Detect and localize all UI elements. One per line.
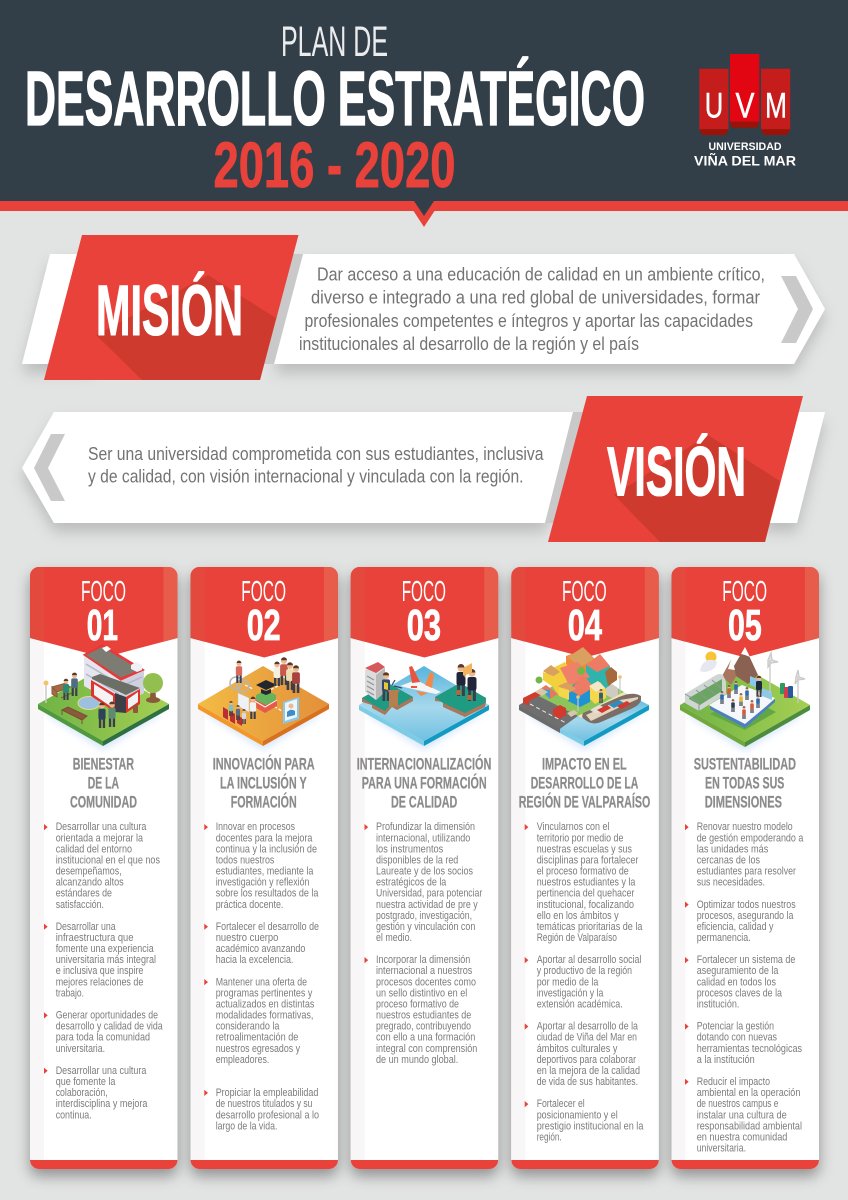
foco 05 heading: 05 — [728, 601, 762, 650]
foco 03 title: PARA UNA FORMACIÓN — [362, 773, 487, 792]
foco 05 list: responsabilidad ambiental — [697, 1120, 802, 1132]
foco 05 list: Optimizar todos nuestros — [697, 899, 796, 911]
foco 01 list: trabajo. — [56, 987, 84, 999]
foco 04 list: nuestras escuelas y sus — [537, 843, 632, 855]
foco 05 heading: FOCO — [722, 576, 767, 608]
panel: misión — [22, 235, 825, 380]
foco 03 list: nuestra actividad de pre y — [376, 899, 478, 911]
foco 01 list: Desarrollar una cultura — [56, 821, 147, 833]
foco 02 heading: FOCO — [241, 576, 286, 608]
foco 03 title: INTERNACIONALIZACIÓN — [357, 754, 491, 773]
foco 05 list: cercanas de los — [697, 854, 760, 866]
foco 03 heading — [402, 576, 446, 650]
foco 05 list: dotando con nuevas — [697, 1032, 777, 1044]
logo: UVM: UNIVERSIDAD — [708, 141, 782, 153]
visión white ribbon — [22, 412, 825, 523]
visión text: Ser una universidad comprometida con sus estudiantes, inclusiva — [88, 443, 544, 464]
visión chevron — [34, 434, 65, 501]
foco 04 list: ello en los ámbitos y — [537, 910, 619, 922]
misión text — [299, 264, 765, 354]
foco 02 list: investigación y reflexión — [216, 877, 309, 889]
foco 01 list: estándares de — [56, 888, 112, 900]
foco 04 heading — [562, 576, 607, 650]
foco 01 list: calidad del entorno — [56, 843, 132, 855]
foco 04 list: territorio por medio de — [537, 832, 623, 844]
foco 03 list: disponibles de la red — [376, 854, 458, 866]
foco 02 title: LA INCLUSIÓN Y — [220, 773, 307, 792]
foco 03 list: nuestros estudiantes de — [376, 1010, 471, 1022]
foco 02 list: considerando la — [216, 1021, 280, 1033]
misión red label: MISIÓN — [96, 272, 243, 351]
title: years: 2016 - 2020 — [214, 129, 456, 201]
foco 04 list: el proceso formativo de — [537, 866, 629, 878]
foco 02 list: práctica docente. — [216, 899, 283, 911]
foco 03 title — [357, 754, 491, 812]
foco 03 list: el medio. — [376, 932, 412, 944]
foco 03 list: de un mundo global. — [376, 1054, 458, 1066]
visión red label: VISIÓN — [607, 433, 746, 511]
visión text — [88, 443, 544, 487]
foco 05 list — [685, 821, 804, 1154]
foco 05 list: de gestión empoderando a — [697, 832, 804, 844]
foco 03 list: procesos docentes como — [376, 976, 476, 988]
foco 02 list: académico avanzando — [216, 943, 305, 955]
foco 02 list: empleadores. — [216, 1054, 269, 1066]
foco 05 list: herramientas tecnológicas — [697, 1043, 802, 1055]
logo: UVM — [694, 54, 796, 169]
foco 04 list: prestigio institucional en la — [537, 1120, 644, 1132]
foco 01 list: continua. — [56, 1109, 92, 1121]
foco 04 list: extensión académica. — [537, 998, 623, 1010]
foco 01 list: infraestructura que — [56, 932, 133, 944]
logo: UVM: M — [765, 86, 787, 125]
foco 01 title — [70, 754, 137, 812]
foco 03 list: Profundizar la dimensión — [376, 821, 475, 833]
foco 05 list: calidad en todos los — [697, 976, 776, 988]
foco 01 heading: 01 — [87, 601, 118, 650]
foco 05 list: Fortalecer un sistema de — [697, 954, 795, 966]
foco 02 list: modalidades formativas, — [216, 1010, 313, 1022]
foco 03 list: pregrado, contribuyendo — [376, 1021, 471, 1033]
foco 01 list: fomente una experiencia — [56, 943, 154, 955]
foco 05 list: eficiencia, calidad y — [697, 921, 774, 933]
foco 01 list: Generar oportunidades de — [56, 1010, 158, 1022]
misión white ribbon — [22, 254, 825, 364]
foco 03 list: con ello a una formación — [376, 1032, 475, 1044]
foco 02 title: FORMACIÓN — [231, 793, 297, 812]
foco 05 list: a la institución — [697, 1054, 755, 1066]
foco 01 list: universitaria. — [56, 1043, 105, 1055]
foco 02 list — [204, 821, 319, 1132]
foco 04 list: institucional, focalizando — [537, 899, 634, 911]
header band — [0, 0, 848, 227]
foco 02 list: nuestros egresados y — [216, 1043, 300, 1055]
foco 05 list: instalar una cultura de — [697, 1109, 787, 1121]
foco 01 heading — [81, 576, 126, 650]
foco 02 list: largo de la vida. — [216, 1120, 277, 1132]
foco 01 list: desempeñamos, — [56, 866, 122, 878]
foco 04 list: disciplinas para fortalecer — [537, 854, 639, 866]
foco 03 list: los instrumentos — [376, 843, 444, 855]
foco 05 list: Potenciar la gestión — [697, 1021, 774, 1033]
foco 05 list: Reducir el impacto — [697, 1076, 770, 1088]
misión red label — [44, 235, 298, 380]
foco 03 heading: 03 — [407, 601, 441, 650]
foco 04 list: ciudad de Viña del Mar en — [537, 1032, 637, 1044]
foco 01 title: DE LA — [88, 773, 119, 792]
foco 05 list: estudiantes para resolver — [697, 866, 796, 878]
icon: coastal region with houses, road and ship — [519, 647, 649, 750]
foco 02 list: desarrollo profesional a lo — [216, 1109, 319, 1121]
foco 05 title — [694, 754, 796, 812]
foco 05 list: institución. — [697, 998, 739, 1010]
foco 01 list: alcanzando altos — [56, 877, 124, 889]
panel: visión — [22, 396, 825, 542]
foco 05 card — [672, 567, 819, 1169]
foco 04 card — [511, 567, 659, 1169]
foco 01 list: desarrollo y calidad de vida — [56, 1021, 163, 1033]
icon: education on orange platform — [198, 657, 329, 750]
foco 04 title: IMPACTO EN EL — [542, 754, 627, 773]
foco 04 heading: FOCO — [562, 576, 607, 608]
panel: foco 03 — [351, 567, 498, 1169]
foco 01 list: Desarrollar una cultura — [56, 1065, 147, 1077]
foco 05 list: procesos claves de la — [697, 987, 783, 999]
foco 04 list: pertinencia del quehacer — [537, 888, 635, 900]
foco 03 list: Incorporar la dimensión — [376, 954, 470, 966]
foco 02 heading: 02 — [247, 601, 281, 650]
foco 04 list: Región de Valparaíso — [537, 932, 617, 944]
foco 05 list: permanencia. — [697, 932, 751, 944]
icon: internationalization over water — [359, 662, 489, 750]
foco 04 list: temáticas prioritarias de la — [537, 921, 643, 933]
foco 01 list: interdisciplina y mejora — [56, 1098, 148, 1110]
foco 01 title: COMUNIDAD — [70, 793, 137, 812]
foco 03 title: DE CALIDAD — [391, 793, 457, 812]
panel: foco 02 — [190, 567, 338, 1169]
foco 04 list: Aportar al desarrollo social — [537, 954, 641, 966]
foco 04 list: nuestros estudiantes y la — [537, 877, 636, 889]
foco 02 title: INNOVACIÓN PARA — [213, 754, 315, 773]
foco 01 title: BIENESTAR — [73, 754, 134, 773]
foco 04 list: Fortalecer el — [537, 1098, 585, 1110]
foco 05 list: universitaria. — [697, 1142, 746, 1154]
foco 03 list: internacional, utilizando — [376, 832, 470, 844]
foco 01 list: orientada a mejorar la — [56, 832, 144, 844]
foco 03 list: internacional a nuestros — [376, 965, 473, 977]
misión text: Dar acceso a una educación de calidad en un ambiente crítico, — [317, 264, 765, 285]
foco 02 heading — [241, 576, 286, 650]
foco 02 list: sobre los resultados de la — [216, 888, 319, 900]
foco 05 list: en nuestra comunidad — [697, 1131, 787, 1143]
foco 04 list: Aportar al desarrollo de la — [537, 1021, 639, 1033]
foco 05 title: DIMENSIONES — [705, 793, 782, 812]
foco 04 list: investigación y la — [537, 987, 604, 999]
foco 02 list: todos nuestros — [216, 854, 275, 866]
foco 02 list: Propiciar la empleabilidad — [216, 1087, 318, 1099]
foco 02 title — [213, 754, 315, 812]
misión text: institucionales al desarrollo de la región y el país — [299, 333, 639, 354]
foco 04 list: y productivo de la región — [537, 965, 632, 977]
icon: sustainability landscape — [680, 647, 810, 751]
foco 04 list: por medio de la — [537, 976, 599, 988]
foco 05 list: Renovar nuestro modelo — [697, 821, 793, 833]
logo: UVM: V — [736, 86, 755, 125]
icon: campus on green island — [38, 644, 169, 750]
foco 02 list: Mantener una oferta de — [216, 976, 307, 988]
foco 05 heading — [722, 576, 767, 650]
foco 03 heading: FOCO — [402, 576, 446, 608]
foco 02 list: Fortalecer el desarrollo de — [216, 921, 319, 933]
foco 03 list: Laureate y de los socios — [376, 866, 473, 878]
foco 04 list: ámbitos culturales y — [537, 1043, 618, 1055]
foco 03 list — [364, 821, 483, 1066]
foco 03 list: postgrado, investigación, — [376, 910, 472, 922]
foco 05 list: aseguramiento de la — [697, 965, 779, 977]
foco 01 list — [44, 821, 163, 1121]
foco 01 list: Desarrollar una — [56, 921, 116, 933]
foco 04 list: posicionamiento y el — [537, 1109, 618, 1121]
foco 02 list: continua y la inclusión de — [216, 843, 317, 855]
foco 02 list: Innovar en procesos — [216, 821, 295, 833]
misión chevron — [781, 276, 813, 343]
foco 05 list: las unidades más — [697, 843, 769, 855]
foco 05 list: sus necesidades. — [697, 877, 765, 889]
foco 01 list: mejores relaciones de — [56, 976, 143, 988]
foco 01 list: satisfacción. — [56, 899, 104, 911]
foco 01 card — [30, 567, 178, 1169]
foco 04 list — [525, 821, 644, 1143]
foco 01 list: institucional en el que nos — [56, 854, 160, 866]
title: plan de: PLAN DE — [281, 18, 388, 66]
foco 05 list: de nuestros campus e — [697, 1098, 778, 1110]
foco 05 title: EN TODAS SUS — [705, 773, 784, 792]
foco 02 list: nuestro cuerpo — [216, 932, 278, 944]
foco 03 list: Universidad, para potenciar — [376, 888, 483, 900]
foco 04 list: Vincularnos con el — [537, 821, 609, 833]
foco 01 list: que fomente la — [56, 1076, 116, 1088]
foco 02 list: docentes para la mejora — [216, 832, 313, 844]
logo: UVM: U — [705, 86, 723, 125]
foco 01 list: universitaria más integral — [56, 954, 156, 966]
foco 01 list: e inclusiva que inspire — [56, 965, 143, 977]
foco 03 list: proceso formativo de — [376, 998, 459, 1010]
foco 02 list: estudiantes, mediante la — [216, 866, 314, 878]
foco 03 list: un sello distintivo en el — [376, 987, 467, 999]
foco 04 heading: 04 — [568, 601, 602, 650]
foco 02 card — [190, 567, 338, 1169]
foco 05 list: procesos, asegurando la — [697, 910, 794, 922]
logo: UVM: VIÑA DEL MAR — [694, 152, 796, 169]
visión text: y de calidad, con visión internacional y vinculada con la región. — [88, 466, 524, 487]
foco 04 title: DESARROLLO DE LA — [531, 773, 638, 792]
foco 02 list: retroalimentación de — [216, 1032, 298, 1044]
foco 03 card — [351, 567, 498, 1169]
foco 03 list: integral con comprensión — [376, 1043, 477, 1055]
foco 02 list: de nuestros titulados y su — [216, 1098, 312, 1110]
foco 05 list: ambiental en la operación — [697, 1087, 800, 1099]
foco 03 list: gestión y vinculación con — [376, 921, 475, 933]
foco 04 list: en la mejora de la calidad — [537, 1065, 640, 1077]
foco 02 list: hacia la excelencia. — [216, 954, 293, 966]
foco 04 title: REGIÓN DE VALPARAÍSO — [519, 793, 650, 812]
panel: foco 04 — [511, 567, 659, 1169]
misión text: diverso e integrado a una red global de universidades, formar — [311, 287, 760, 308]
foco 01 heading: FOCO — [81, 576, 126, 608]
visión red label — [548, 396, 803, 542]
foco 01 list: para toda la comunidad — [56, 1032, 150, 1044]
foco 03 list: estratégicos de la — [376, 877, 447, 889]
foco 04 list: de vida de sus habitantes. — [537, 1076, 638, 1088]
foco 01 list: colaboración, — [56, 1087, 108, 1099]
panel: foco 05 — [672, 567, 819, 1169]
foco 02 list: actualizados en distintas — [216, 998, 315, 1010]
foco 04 list: deportivos para colaborar — [537, 1054, 636, 1066]
foco 04 list: región. — [537, 1131, 562, 1143]
misión text: profesionales competentes e íntegros y aportar las capacidades — [304, 310, 753, 331]
foco 04 title — [519, 754, 650, 812]
foco 02 list: programas pertinentes y — [216, 987, 313, 999]
panel: foco 01 — [30, 567, 178, 1169]
